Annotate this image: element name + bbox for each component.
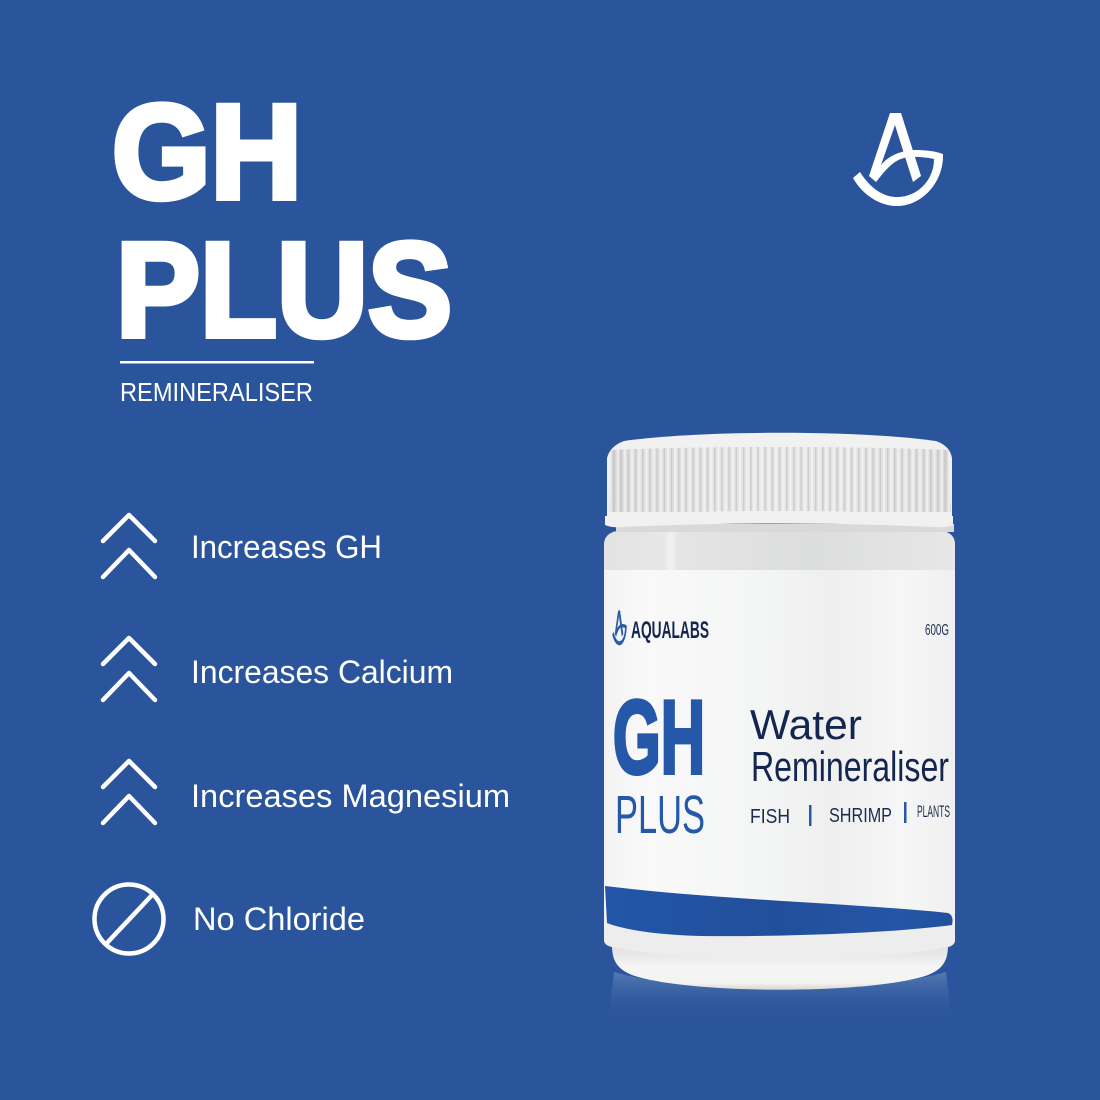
title: GH [112, 78, 302, 227]
label product name: GH [613, 680, 705, 796]
product jar: PLANTS [917, 802, 950, 821]
jar reflection [608, 972, 952, 1022]
subtitle: remineraliser: REMINERALISER [120, 377, 313, 407]
product jar [604, 433, 955, 1022]
icon: prohibited circle [94, 884, 164, 954]
jar base [612, 945, 948, 990]
jar body [604, 531, 955, 959]
benefit: increases GH: Increases GH [191, 529, 382, 565]
benefit: no chloride [94, 884, 365, 954]
benefit: increases calcium: Increases Calcium [191, 654, 453, 690]
label description: Remineraliser [751, 743, 949, 790]
label description [750, 701, 949, 790]
benefit: increases magnesium: Increases Magnesium [191, 778, 510, 814]
jar lid [605, 433, 953, 527]
title [112, 78, 452, 365]
benefit: increases calcium [103, 638, 453, 700]
label tags [750, 802, 950, 828]
label tags: SHRIMP [829, 805, 892, 827]
label weight: 600G [925, 622, 949, 639]
benefit: increases GH [103, 515, 382, 577]
jar neck ring [616, 524, 954, 532]
label product name [613, 680, 705, 845]
label band [605, 886, 952, 936]
brand logo [853, 113, 943, 206]
label logo [612, 611, 709, 645]
label logo: AQUALABS [631, 617, 709, 644]
icon: double chevron up [103, 761, 155, 823]
jar lower rim [604, 918, 955, 959]
label product name: PLUS [615, 785, 705, 845]
icon: double chevron up [103, 515, 155, 577]
jar shoulder [604, 531, 955, 570]
label description: Water [750, 701, 862, 748]
title: PLUS [116, 216, 452, 365]
benefit: increases magnesium [103, 761, 510, 823]
label tags: FISH [750, 806, 790, 828]
benefit: no chloride: No Chloride [193, 901, 365, 937]
icon: double chevron up [103, 638, 155, 700]
